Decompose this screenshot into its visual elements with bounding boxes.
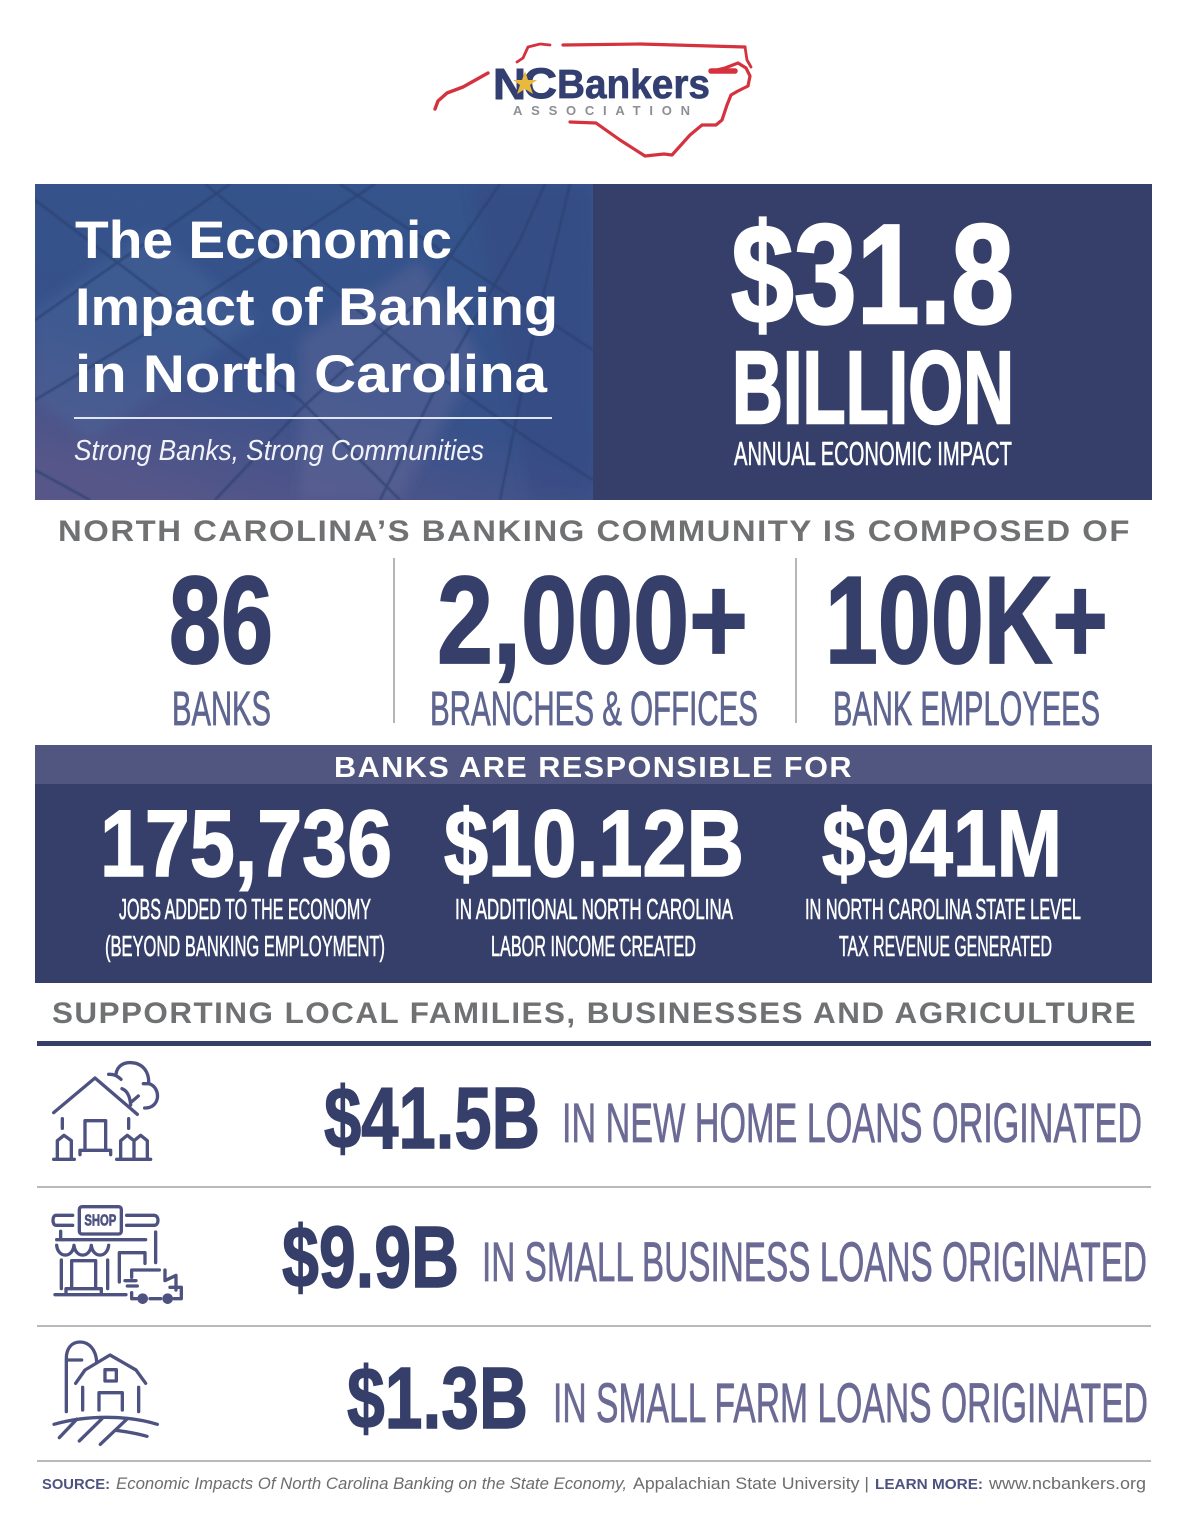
stat: jobs: JOBS ADDED TO THE ECONOMY xyxy=(119,894,371,926)
stat: jobs xyxy=(100,791,392,963)
stats row xyxy=(169,552,1108,736)
footer source line: Economic Impacts Of North Carolina Banking on the State Economy, xyxy=(116,1474,627,1493)
stat: employees xyxy=(825,552,1108,736)
icon: house with tree xyxy=(54,1063,157,1159)
stat: branches: 2,000+ xyxy=(437,552,748,690)
wordmark: C xyxy=(523,60,557,108)
stat: tax revenue xyxy=(805,791,1081,963)
panel: headline figure: $31.8 xyxy=(731,195,1014,354)
state outline xyxy=(435,44,751,156)
footer source line: LEARN MORE: xyxy=(875,1476,983,1493)
stat: labor income: LABOR INCOME CREATED xyxy=(491,931,696,963)
stat: labor income: IN ADDITIONAL NORTH CAROLINA xyxy=(455,894,733,926)
wordmark: ASSOCIATION xyxy=(513,103,690,118)
stat: jobs: 175,736 xyxy=(100,791,392,897)
heading: supporting local families: SUPPORTING LOCAL FAMILIES, BUSINESSES AND AGRICULTURE xyxy=(52,997,1137,1030)
row: home loans: $41.5B xyxy=(324,1070,540,1167)
icon: shop with delivery truck xyxy=(53,1207,181,1302)
logo: NC Bankers Association xyxy=(435,44,751,156)
stat: banks: 86 xyxy=(169,552,273,690)
icon: barn and silo xyxy=(54,1342,157,1444)
heading: banking community: NORTH CAROLINA’S BANKING COMMUNITY IS COMPOSED OF xyxy=(58,515,1131,548)
title: The Economic xyxy=(75,211,452,270)
stat: labor income xyxy=(444,791,744,963)
footer source line: SOURCE: xyxy=(42,1476,110,1493)
subtitle: Strong Banks, Strong Communities xyxy=(74,435,484,467)
row: small business loans: $9.9B xyxy=(282,1209,459,1306)
row: small farm loans: $1.3B xyxy=(347,1350,528,1447)
footer source line xyxy=(42,1474,1146,1493)
row: small business loans xyxy=(53,1207,1147,1306)
stat: tax revenue: $941M xyxy=(822,791,1062,897)
row: home loans xyxy=(54,1063,1142,1167)
stat: banks xyxy=(169,552,273,736)
stat: labor income: $10.12B xyxy=(444,791,744,897)
panel: building photo with title xyxy=(35,184,593,500)
title: Impact of Banking xyxy=(75,278,558,337)
title: in North Carolina xyxy=(75,345,548,404)
panel: headline figure: ANNUAL ECONOMIC IMPACT xyxy=(734,435,1012,472)
hero panel xyxy=(35,184,1152,500)
title xyxy=(75,211,558,404)
wordmark: Bankers xyxy=(557,61,710,107)
panel: headline figure xyxy=(593,184,1152,500)
panel: banks are responsible for: BANKS ARE RESPONSIBLE FOR xyxy=(334,752,853,784)
footer source line: www.ncbankers.org xyxy=(988,1474,1146,1493)
panel: banks are responsible for xyxy=(35,745,1152,983)
panel: headline figure: BILLION xyxy=(732,330,1014,445)
stat: branches xyxy=(430,552,758,736)
footer source line: Appalachian State University | xyxy=(633,1474,869,1493)
row: small farm loans xyxy=(54,1342,1148,1447)
stat: banks: BANKS xyxy=(172,683,271,736)
wordmark: N xyxy=(493,60,526,109)
wordmark xyxy=(493,60,710,118)
stat: jobs: (BEYOND BANKING EMPLOYMENT) xyxy=(105,931,385,963)
icon: shop with delivery truck: SHOP xyxy=(84,1213,116,1230)
stat: branches: BRANCHES & OFFICES xyxy=(430,683,758,736)
stat: employees: 100K+ xyxy=(825,552,1108,690)
